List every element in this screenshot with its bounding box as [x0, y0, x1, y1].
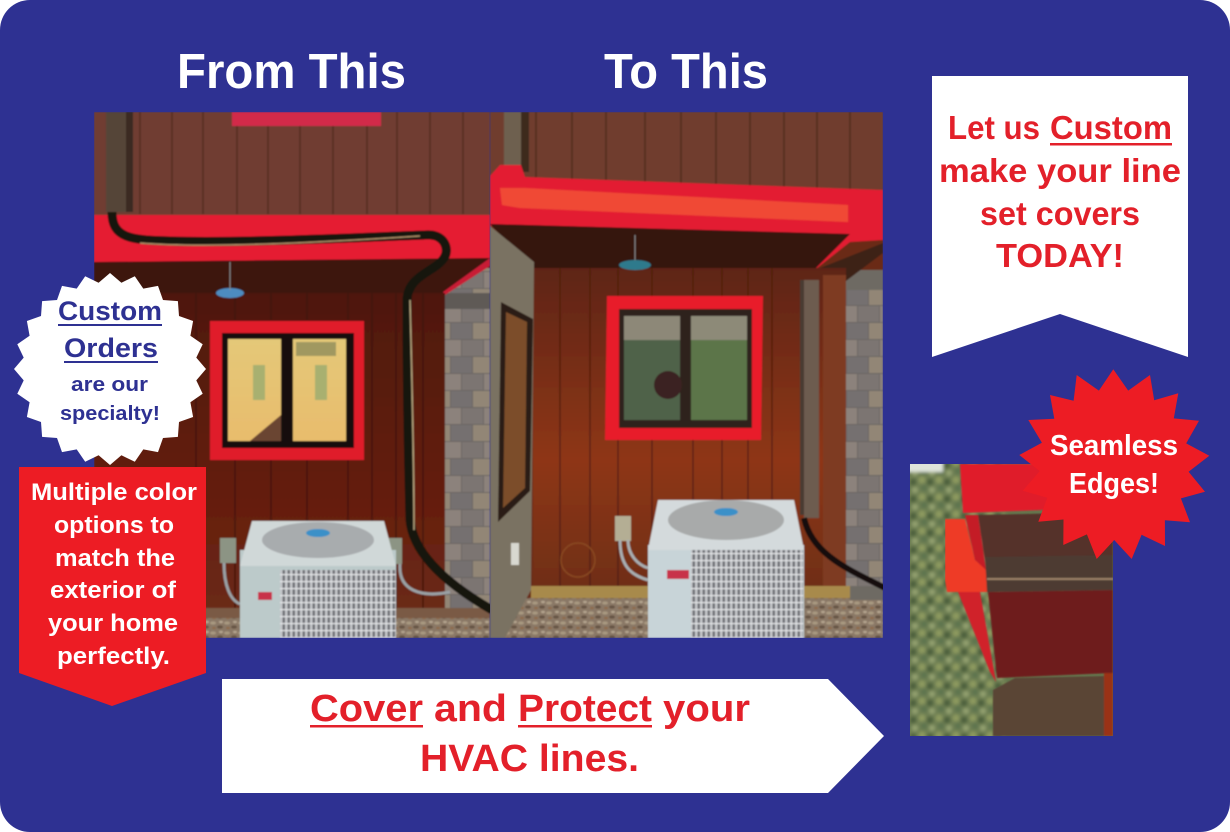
callout: multiple color options banner: perfectly.	[57, 643, 170, 670]
callout: custom line set covers banner: Let us	[948, 109, 1040, 146]
callout: multiple color options banner: match the	[55, 545, 175, 572]
callout: multiple color options banner: Multiple color	[31, 479, 197, 506]
callout: custom orders badge: are our	[71, 374, 148, 396]
photo: after, covered lines	[490, 112, 885, 638]
arrow: cover and protect your HVAC lines: HVAC lines.	[420, 738, 639, 780]
callout: multiple color options banner: your home	[48, 610, 178, 637]
callout: custom orders badge: Custom	[58, 296, 162, 326]
arrow: cover and protect your HVAC lines: your	[663, 688, 750, 730]
callout: seamless edges starburst: Edges!	[1069, 468, 1159, 500]
callout: multiple color options banner: options to	[54, 512, 174, 539]
heading: To This: To This	[604, 45, 768, 99]
callout: seamless edges starburst	[1019, 369, 1209, 559]
callout: custom orders badge	[14, 273, 206, 465]
callout: custom line set covers banner: set covers	[980, 195, 1140, 232]
callout: custom line set covers banner	[932, 76, 1188, 357]
heading: From This: From This	[177, 45, 406, 99]
photo: seamless edge detail	[905, 458, 1113, 740]
callout: seamless edges starburst: Seamless	[1050, 430, 1178, 462]
arrow: cover and protect your HVAC lines	[222, 679, 884, 793]
callout: multiple color options banner: exterior of	[50, 577, 177, 604]
callout: custom line set covers banner: Custom	[1050, 109, 1172, 146]
callout: custom line set covers banner: make your line	[939, 152, 1181, 189]
callout: custom line set covers banner: TODAY!	[996, 237, 1124, 274]
arrow: cover and protect your HVAC lines: Cover	[310, 688, 423, 730]
arrow: cover and protect your HVAC lines: and	[434, 688, 507, 730]
callout: multiple color options banner	[19, 467, 206, 706]
arrow: cover and protect your HVAC lines: Protect	[518, 688, 652, 730]
callout: custom orders badge: specialty!	[60, 403, 160, 425]
callout: custom orders badge: Orders	[64, 333, 158, 363]
photo: before, exposed lines	[94, 112, 492, 638]
